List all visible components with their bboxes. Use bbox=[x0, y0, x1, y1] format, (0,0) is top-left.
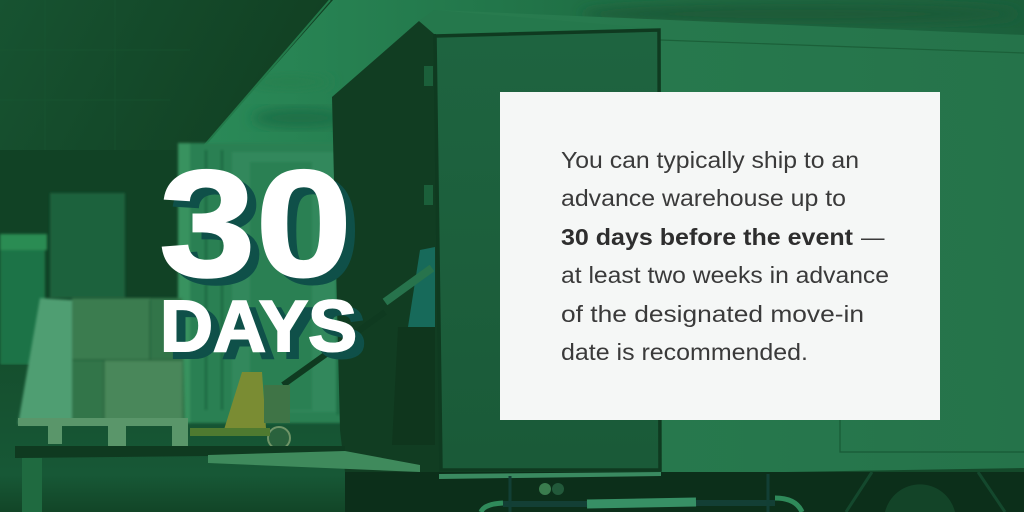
body copy: advance warehouse up to bbox=[561, 185, 846, 211]
body copy: of the designated move-in bbox=[561, 301, 864, 327]
body copy: — bbox=[861, 224, 885, 250]
body copy: 30 days before the event bbox=[561, 224, 853, 250]
bright strip on left bbox=[0, 234, 47, 365]
body copy: at least two weeks in advance bbox=[561, 262, 889, 288]
lift gate platform bbox=[15, 446, 1024, 512]
truck wheel bbox=[885, 484, 955, 512]
headline shadow: DAYS bbox=[169, 294, 366, 374]
worker dark legs bbox=[392, 327, 435, 445]
body copy: date is recommended. bbox=[561, 339, 808, 365]
truck lower panel outline bbox=[840, 420, 1024, 452]
truck door bbox=[424, 30, 660, 470]
worker arm bbox=[385, 268, 432, 302]
warehouse floor bbox=[0, 365, 345, 512]
body copy: You can typically ship to an bbox=[561, 147, 859, 173]
worker shirt bbox=[408, 247, 435, 327]
open doorway in background bbox=[178, 130, 345, 423]
headline: 30 days bbox=[159, 139, 366, 374]
truck open interior bbox=[332, 21, 440, 472]
warehouse dark rear wall bbox=[0, 150, 180, 365]
number 30: 30 bbox=[159, 139, 352, 309]
word days: DAYS bbox=[160, 287, 357, 367]
sky bbox=[200, 0, 1024, 150]
pallet jack handle bbox=[283, 312, 385, 385]
boxes on pallet bbox=[18, 298, 185, 424]
roof corner bbox=[419, 10, 660, 34]
truck side wall bbox=[434, 10, 1024, 474]
truck roof seam bbox=[660, 40, 1024, 53]
truck undercarriage bbox=[439, 472, 1005, 512]
pallet jack bbox=[190, 372, 290, 449]
warehouse rear door bbox=[50, 193, 125, 298]
headline shadow: 30 bbox=[168, 146, 361, 316]
text panel bbox=[500, 92, 940, 420]
body copy bbox=[561, 147, 889, 365]
pallet bbox=[18, 418, 188, 448]
headline shadow bbox=[168, 146, 366, 374]
warehouse ceiling bbox=[0, 0, 333, 190]
